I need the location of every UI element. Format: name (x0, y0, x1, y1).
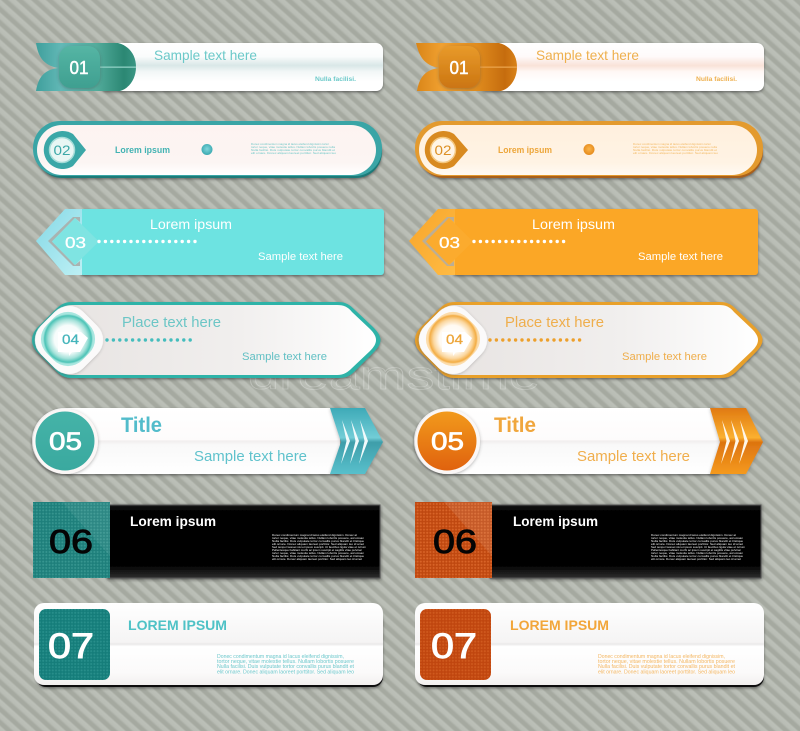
body text: Sed tempor laoreet nisi et ipsum suscipit. Ut faucibus ligula vitae et rutrum (651, 545, 745, 549)
body text: tortor neque, vitae molestie tellus. Nullam lobortis posuere (598, 659, 735, 665)
white diamond (27, 298, 111, 382)
black panel (108, 505, 380, 578)
heading: LOREM IPSUM (128, 617, 227, 633)
number: 07 (48, 627, 94, 666)
number: 03 (439, 235, 460, 252)
body text: Pellentesque habitant morbi ac ipsum suscipit et sagittis vitae pulvinar (651, 548, 741, 552)
label: Lorem ipsum (115, 145, 170, 155)
body text: elit ornare. Donec aliquam laoreet porttitor. Sed aliquam leo id amet (272, 542, 364, 546)
heading: Sample text here (536, 47, 639, 63)
pin inner circle (430, 138, 456, 162)
number: 02 (54, 143, 70, 158)
body text: elit ornare. Donec aliquam laoreet porttitor. Sed aliquam leo id amet (272, 557, 362, 561)
inner panel (36, 305, 376, 375)
teal ring (33, 304, 103, 374)
banner 07 teal (34, 603, 383, 687)
white bar (100, 43, 383, 91)
body text: elit ornare. Donec aliquam laoreet porttitor. Sed aliquam leo id amet (651, 542, 743, 546)
banner 05 teal (32, 408, 383, 474)
banner 01 teal (36, 43, 383, 91)
body text: tortor neque, vitae molestie tellus. Nullam lobortis posuere nulla (633, 145, 717, 149)
body text: tortor neque, vitae molestie tellus. Nullam lobortis posuere, accumsan (272, 536, 364, 540)
body text: Nulla facilisi. Duis vulputate tortor convallis purus blandit et tristique (651, 554, 743, 558)
outer frame (415, 302, 762, 378)
dot (202, 144, 212, 155)
body text: Donec condimentum magna id lacus eleifend dignissim tortor (251, 142, 329, 146)
heading: Sample text here (154, 47, 257, 63)
diamond (52, 218, 99, 265)
dotted line (107, 338, 196, 342)
inner panel (37, 125, 376, 175)
body text: tortor neque, vitae molestie tellus. Nullam lobortis posuere (217, 659, 354, 665)
body text: Nulla facilisi. Duis vulputate tortor convallis purus blandit et (598, 664, 736, 670)
white panel (34, 603, 383, 685)
circle border (33, 409, 98, 474)
caption: Sample text here (242, 351, 327, 363)
banner 04 teal (27, 298, 380, 382)
number box (39, 609, 110, 680)
outer frame (32, 302, 380, 378)
caption: Sample text here (577, 448, 690, 465)
heading: Lorem ipsum (532, 217, 615, 232)
body text: Nulla facilisi. Duis vulputate tortor convallis purus blandit et tristique (272, 539, 364, 543)
body text: Donec condimentum magna id lacus eleifend dignissim. Donec at (651, 533, 736, 537)
body text: Nulla facilisi. Duis vulputate tortor convallis purus blandit et (251, 148, 335, 152)
ribbon (36, 43, 136, 91)
pin (44, 131, 86, 169)
speech bubble (58, 332, 88, 356)
arrow head (409, 209, 455, 275)
circle (36, 412, 94, 470)
body text (598, 654, 736, 676)
body text (251, 142, 337, 155)
arrow (710, 408, 763, 474)
number: 01 (70, 57, 88, 78)
body text: Pellentesque habitant morbi ac ipsum suscipit et sagittis vitae pulvinar (272, 548, 362, 552)
dotted line (99, 240, 195, 243)
dark base (417, 610, 764, 687)
dotted line (474, 240, 570, 243)
outer pill (33, 121, 382, 176)
inner panel (419, 305, 758, 375)
body text: elit ornare. Donec aliquam laoreet porttitor. Sed aliquam leo id amet (651, 557, 741, 561)
body text: Donec condimentum magna id lacus eleifend dignissim, (217, 654, 344, 660)
banner 04 orange (411, 298, 762, 382)
white bar (414, 408, 720, 474)
white diamond (411, 298, 495, 382)
ribbon crease (480, 66, 517, 68)
white bar (32, 408, 340, 474)
square shine (62, 502, 110, 556)
number: 05 (431, 428, 464, 456)
chevrons (721, 420, 748, 464)
grey chevron (422, 217, 454, 266)
body text: Nulla facilisi. Duis vulputate tortor convallis purus blandit et (217, 664, 355, 670)
body text (272, 533, 366, 561)
body text: tortor neque, vitae molestie tellus. Nullam lobortis posuere, accumsan (651, 551, 743, 555)
number box (439, 46, 480, 88)
banner 02 teal (33, 121, 382, 178)
banner 06 orange (415, 502, 761, 578)
square shine (444, 502, 492, 556)
body text: Donec condimentum magna id lacus eleifend dignissim. Donec at (272, 533, 357, 537)
arrow (330, 408, 383, 474)
body text: elit ornare. Donec aliquam laoreet porttitor. Sed aliquam leo (217, 670, 354, 676)
body text: elit ornare. Donec aliquam laoreet porttitor. Sed aliquam leo (251, 151, 337, 155)
label: Lorem ipsum (498, 145, 552, 155)
speech bubble (442, 332, 472, 356)
white bar (480, 43, 764, 91)
main panel (80, 209, 384, 275)
number: 06 (49, 523, 93, 560)
number: 02 (434, 143, 452, 158)
body text: tortor neque, vitae molestie tellus. Nullam lobortis posuere nulla (251, 145, 335, 149)
dark lower edge (36, 126, 382, 178)
number: 01 (450, 57, 468, 78)
outer pill (415, 121, 763, 176)
caption: Nulla facilisi. (696, 76, 737, 83)
pin inner circle (50, 138, 74, 162)
number: 04 (446, 331, 463, 347)
dark lower edge (418, 126, 763, 178)
heading: Lorem ipsum (513, 513, 598, 529)
banner 03 orange (409, 209, 758, 275)
body text: Nulla facilisi. Duis vulputate tortor convallis purus blandit et tristique (272, 554, 364, 558)
body text: elit ornare. Donec aliquam laoreet porttitor. Sed aliquam leo (598, 670, 735, 676)
banner 03 teal (36, 209, 384, 275)
heading: Lorem ipsum (130, 513, 216, 529)
inner panel (419, 125, 757, 175)
number box (420, 609, 491, 680)
body text: Nulla facilisi. Duis vulputate tortor convallis purus blandit et tristique (651, 539, 743, 543)
body text: Donec condimentum magna id lacus eleifend dignissim, (598, 654, 725, 660)
pin (425, 131, 468, 169)
ribbon crease (100, 66, 136, 68)
heading: Lorem ipsum (150, 217, 232, 232)
number: 07 (431, 627, 477, 666)
watermark: dreamstime (248, 354, 540, 398)
orange ring (418, 304, 488, 374)
caption: Nulla facilisi. (315, 76, 356, 83)
ribbon (416, 43, 517, 91)
body text: tortor neque, vitae molestie tellus. Nullam lobortis posuere, accumsan (651, 536, 743, 540)
banner 05 orange (414, 408, 763, 474)
number: 04 (62, 331, 79, 347)
body text (217, 654, 355, 676)
caption: Sample text here (194, 448, 307, 465)
diamond (426, 218, 473, 265)
circle border (415, 409, 480, 474)
banner 02 orange (415, 121, 763, 178)
number: 05 (49, 428, 82, 456)
number square (415, 502, 492, 578)
main panel (453, 209, 758, 275)
banner 01 orange (416, 43, 764, 91)
heading: Place text here (505, 315, 604, 331)
body text: elit ornare. Donec aliquam laoreet porttitor. Sed aliquam leo (633, 151, 719, 155)
body text: Sed tempor laoreet nisi et ipsum suscipit. Ut faucibus ligula vitae et rutrum (272, 545, 366, 549)
heading: LOREM IPSUM (510, 617, 609, 633)
banner 07 orange (415, 603, 764, 687)
body text (633, 142, 719, 155)
title: Title (121, 414, 162, 437)
chevrons (341, 420, 368, 464)
white panel (415, 603, 764, 685)
body text: Nulla facilisi. Duis vulputate tortor convallis purus blandit et (633, 148, 717, 152)
body text: tortor neque, vitae molestie tellus. Nullam lobortis posuere, accumsan (272, 551, 364, 555)
number box (59, 46, 100, 88)
black panel (490, 505, 761, 578)
dotted line (490, 338, 580, 342)
dark base (36, 610, 383, 687)
arrow head (36, 209, 82, 275)
banner 06 teal (33, 502, 380, 578)
number: 03 (65, 235, 86, 252)
caption: Sample text here (258, 251, 343, 263)
grey chevron (48, 217, 80, 266)
dot (584, 144, 594, 155)
number: 06 (433, 523, 477, 560)
body text: Donec condimentum magna id lacus eleifend dignissim tortor (633, 142, 711, 146)
caption: Sample text here (638, 251, 723, 263)
heading: Place text here (122, 315, 221, 331)
number square (33, 502, 110, 578)
body text (651, 533, 745, 561)
circle (418, 412, 476, 470)
title: Title (494, 414, 536, 437)
caption: Sample text here (622, 351, 707, 363)
